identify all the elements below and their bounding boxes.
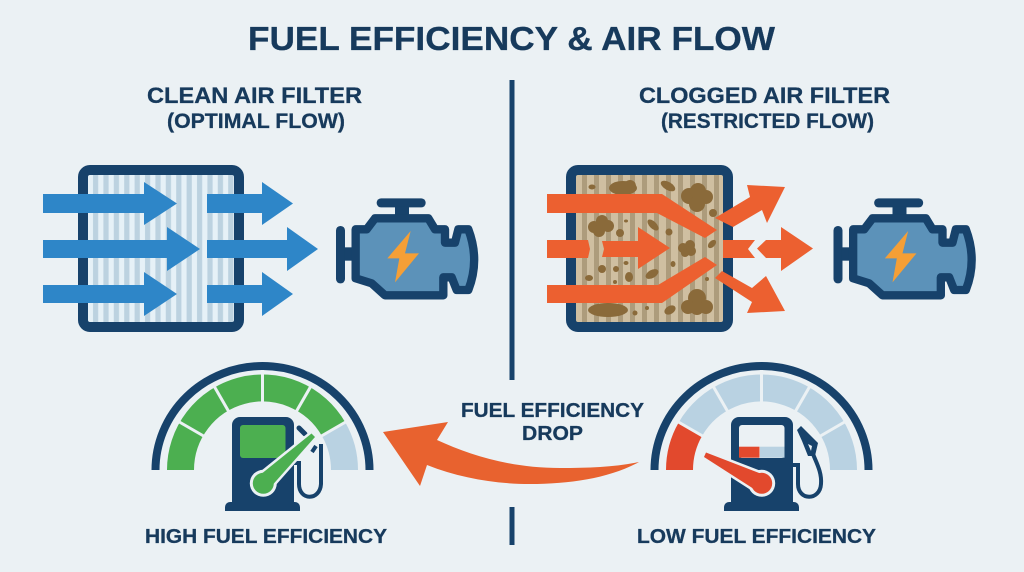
- icon: engine, clean side: [336, 198, 474, 295]
- icon: fuel pump: [724, 417, 821, 511]
- blue arrows into and out of the filter: [43, 182, 318, 316]
- title: FUEL EFFICIENCY & AIR FLOW: [248, 20, 776, 57]
- heading: clean air filter: (OPTIMAL FLOW): [167, 110, 345, 133]
- icon: fuel pump: [225, 417, 321, 511]
- heading: clogged air filter: (RESTRICTED FLOW): [661, 110, 874, 133]
- label: low fuel efficiency: LOW FUEL EFFICIENCY: [637, 526, 877, 548]
- gauge: high fuel efficiency: [156, 366, 370, 511]
- gauge needle: high: [250, 434, 315, 497]
- label: fuel efficiency drop: [461, 400, 645, 445]
- label: fuel efficiency drop: DROP: [522, 423, 583, 445]
- heading: clean air filter: [147, 83, 362, 133]
- label: fuel efficiency drop: FUEL EFFICIENCY: [461, 400, 645, 422]
- panel: clean air filter: [43, 170, 318, 327]
- gauge: low fuel efficiency: [654, 366, 868, 511]
- heading: clogged air filter: [639, 83, 890, 133]
- curved arrow: fuel efficiency drop: [383, 422, 639, 486]
- heading: clogged air filter: CLOGGED AIR FILTER: [639, 83, 890, 108]
- panel: clogged air filter: [547, 170, 813, 327]
- icon: engine, clogged side: [833, 198, 972, 295]
- heading: clean air filter: CLEAN AIR FILTER: [147, 83, 362, 108]
- label: high fuel efficiency: HIGH FUEL EFFICIENCY: [145, 526, 388, 548]
- gauge needle: low: [704, 452, 775, 497]
- dirt particles: [585, 179, 718, 317]
- orange restricted-flow arrows: [547, 185, 813, 313]
